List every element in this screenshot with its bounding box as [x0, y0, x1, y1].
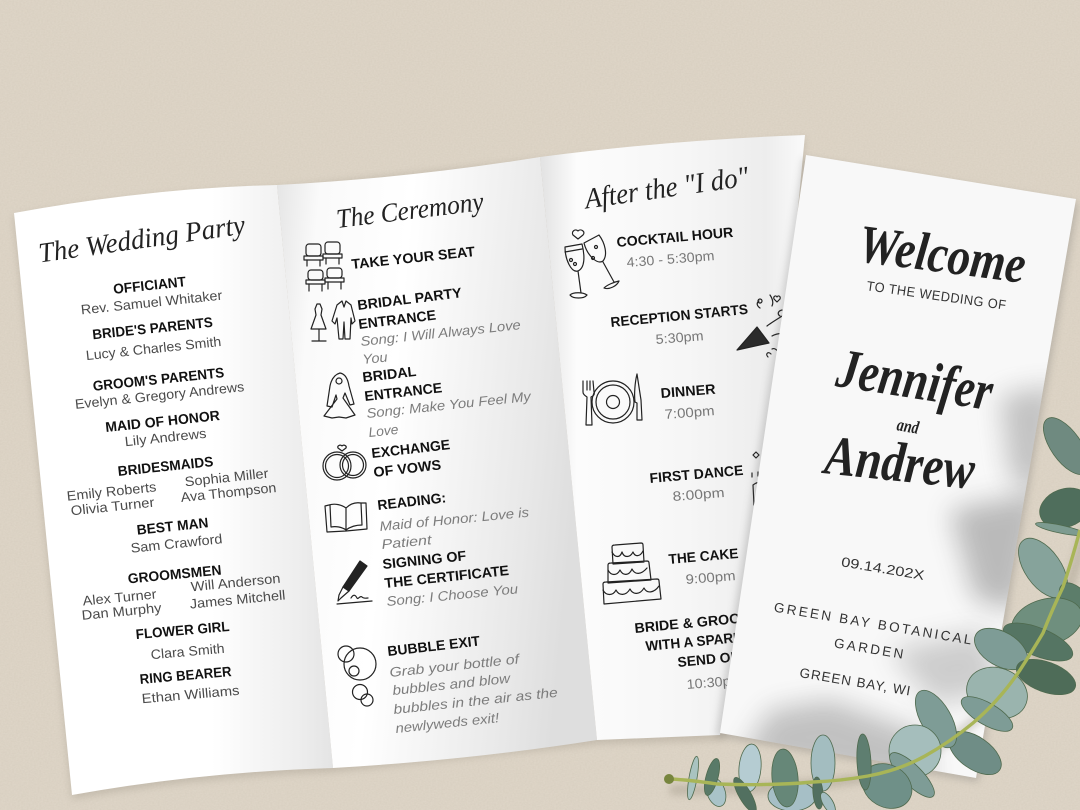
party list: Sophia Miller	[184, 466, 270, 489]
text: venue: GREEN BAY, WI	[799, 665, 911, 698]
party list	[66, 273, 286, 706]
text: first dance: FIRST DANCE	[649, 462, 744, 486]
text: dinner: DINNER	[660, 381, 716, 401]
trifold program brochure	[14, 135, 805, 799]
text: send off: BRIDE & GROOM	[634, 609, 753, 636]
text: reading: Patient	[381, 532, 434, 552]
text: bridal entrance	[362, 363, 533, 440]
text: and: and	[895, 414, 921, 438]
text: date: 09.14.202X	[840, 554, 925, 583]
party list: Lily Andrews	[124, 426, 207, 449]
party list: BRIDESMAIDS	[117, 453, 214, 479]
text: signing of the certificate: Song: I Choose You	[386, 581, 519, 609]
party list: BRIDE'S PARENTS	[91, 314, 213, 342]
text: the cake: 9:00pm	[685, 568, 736, 587]
stem	[670, 530, 1080, 785]
card drop shadow	[716, 158, 1078, 782]
text: reception starts: RECEPTION STARTS	[610, 301, 749, 330]
text: send off: WITH A SPARKLER	[645, 626, 771, 654]
heading: The Wedding Party: The Wedding Party	[37, 210, 248, 269]
text: bridal party entrance: ENTRANCE	[357, 307, 437, 332]
text: first dance: 8:00pm	[672, 485, 725, 504]
text: reading: READING:	[377, 489, 447, 513]
text: exchange of vows	[371, 436, 451, 480]
name: Andrew: Andrew	[820, 424, 978, 502]
text: bubble exit: BUBBLE EXIT	[387, 633, 481, 659]
text: reception starts	[610, 301, 749, 347]
party list: Will Anderson	[190, 571, 281, 594]
text: to the wedding of: TO THE WEDDING OF	[866, 278, 1007, 313]
party list: GROOM'S PARENTS	[92, 364, 225, 394]
icon: plate and cutlery	[583, 374, 642, 425]
panel: the wedding party	[14, 185, 333, 795]
party list: Ava Thompson	[180, 480, 277, 505]
text: exchange of vows: EXCHANGE	[371, 436, 451, 461]
text: cocktail hour	[616, 224, 734, 270]
text: venue	[773, 600, 973, 698]
text: bridal party entrance: BRIDAL PARTY	[356, 284, 463, 313]
front welcome card	[716, 155, 1078, 790]
text: send off	[634, 609, 771, 692]
text: bubble exit: bubbles and blow	[392, 671, 512, 698]
text: send off: SEND OFF	[677, 647, 748, 670]
icon: pen signing	[337, 561, 372, 604]
heading: Welcome: Welcome	[855, 213, 1030, 295]
text: bridal entrance: Love	[368, 422, 399, 440]
party list: Dan Murphy	[81, 600, 162, 623]
text: send off: 10:30pm	[686, 673, 743, 692]
text: first dance	[649, 462, 744, 504]
party list: James Mitchell	[189, 587, 286, 612]
panel: after the I do	[540, 135, 805, 740]
card surface	[720, 155, 1076, 778]
text: bubble exit: bubbles in the air as the	[393, 685, 558, 717]
party list: MAID OF HONOR	[104, 407, 220, 435]
party list: Olivia Turner	[70, 495, 156, 518]
party list: Ethan Williams	[141, 683, 240, 706]
icon: chairs	[304, 242, 344, 291]
text: signing of the certificate: SIGNING OF	[382, 547, 467, 572]
text: exchange of vows: OF VOWS	[373, 456, 442, 480]
icon: bride	[324, 373, 355, 418]
text: bridal party entrance	[356, 284, 521, 367]
text: bridal entrance: ENTRANCE	[364, 379, 443, 404]
panel: the ceremony	[277, 157, 597, 768]
text: venue: GREEN BAY BOTANICAL	[773, 600, 973, 648]
party list: BEST MAN	[136, 514, 209, 538]
text: the cake	[668, 545, 739, 587]
text: reading: Maid of Honor: Love is	[379, 505, 530, 534]
name: Jennifer: Jennifer	[832, 337, 998, 423]
party list: Rev. Samuel Whitaker	[80, 288, 223, 317]
text: take your seat: TAKE YOUR SEAT	[351, 243, 476, 272]
text: bubble exit	[387, 633, 558, 736]
text: venue: GARDEN	[833, 635, 905, 662]
party list: Lucy & Charles Smith	[85, 334, 222, 363]
text: signing of the certificate	[382, 547, 519, 609]
foliage shadows on card	[740, 385, 1060, 790]
party list: Alex Turner	[82, 586, 158, 609]
icon: dress and suit	[311, 301, 355, 341]
party list: Clara Smith	[150, 641, 225, 662]
branch shadow on fabric	[670, 530, 1080, 790]
text: signing of the certificate: THE CERTIFICATE	[384, 562, 510, 591]
text: bridal party entrance: You	[362, 349, 389, 367]
party list: FLOWER GIRL	[135, 618, 230, 642]
text: the cake: THE CAKE	[668, 545, 739, 567]
party list: RING BEARER	[139, 663, 232, 687]
text: bridal party entrance: Song: I Will Always Love	[360, 317, 521, 349]
leaves	[685, 410, 1080, 810]
party list: Evelyn & Gregory Andrews	[74, 379, 245, 412]
party list: GROOMSMEN	[127, 562, 222, 586]
text: reception starts: 5:30pm	[655, 328, 704, 347]
icon: bubbles	[338, 646, 376, 706]
icon: clinking glasses	[565, 230, 619, 298]
eucalyptus branch	[664, 410, 1080, 810]
bud	[664, 774, 674, 784]
brochure drop shadow	[14, 138, 805, 799]
icon: open book	[325, 503, 367, 532]
text: bridal entrance: BRIDAL	[362, 363, 417, 385]
icon: dancing couple	[752, 449, 780, 508]
text: reading	[377, 489, 530, 552]
heading: After the I do: After the "I do"	[581, 161, 751, 216]
icon: wedding cake	[603, 543, 661, 604]
party list: Sam Crawford	[130, 531, 223, 556]
party list: Emily Roberts	[66, 479, 157, 504]
icon: party popper	[737, 295, 792, 357]
text: cocktail hour: COCKTAIL HOUR	[616, 224, 734, 250]
heading: The Ceremony: The Ceremony	[335, 186, 485, 234]
party list: OFFICIANT	[112, 273, 187, 297]
icon: wedding rings	[323, 445, 366, 480]
text: bridal entrance: Song: Make You Feel My	[366, 389, 533, 421]
text: cocktail hour: 4:30 - 5:30pm	[626, 248, 715, 270]
text: dinner: 7:00pm	[664, 403, 715, 422]
text: bubble exit: newlyweds exit!	[395, 710, 500, 736]
text: bubble exit: Grab your bottle of	[389, 651, 521, 680]
text: dinner	[660, 381, 716, 422]
